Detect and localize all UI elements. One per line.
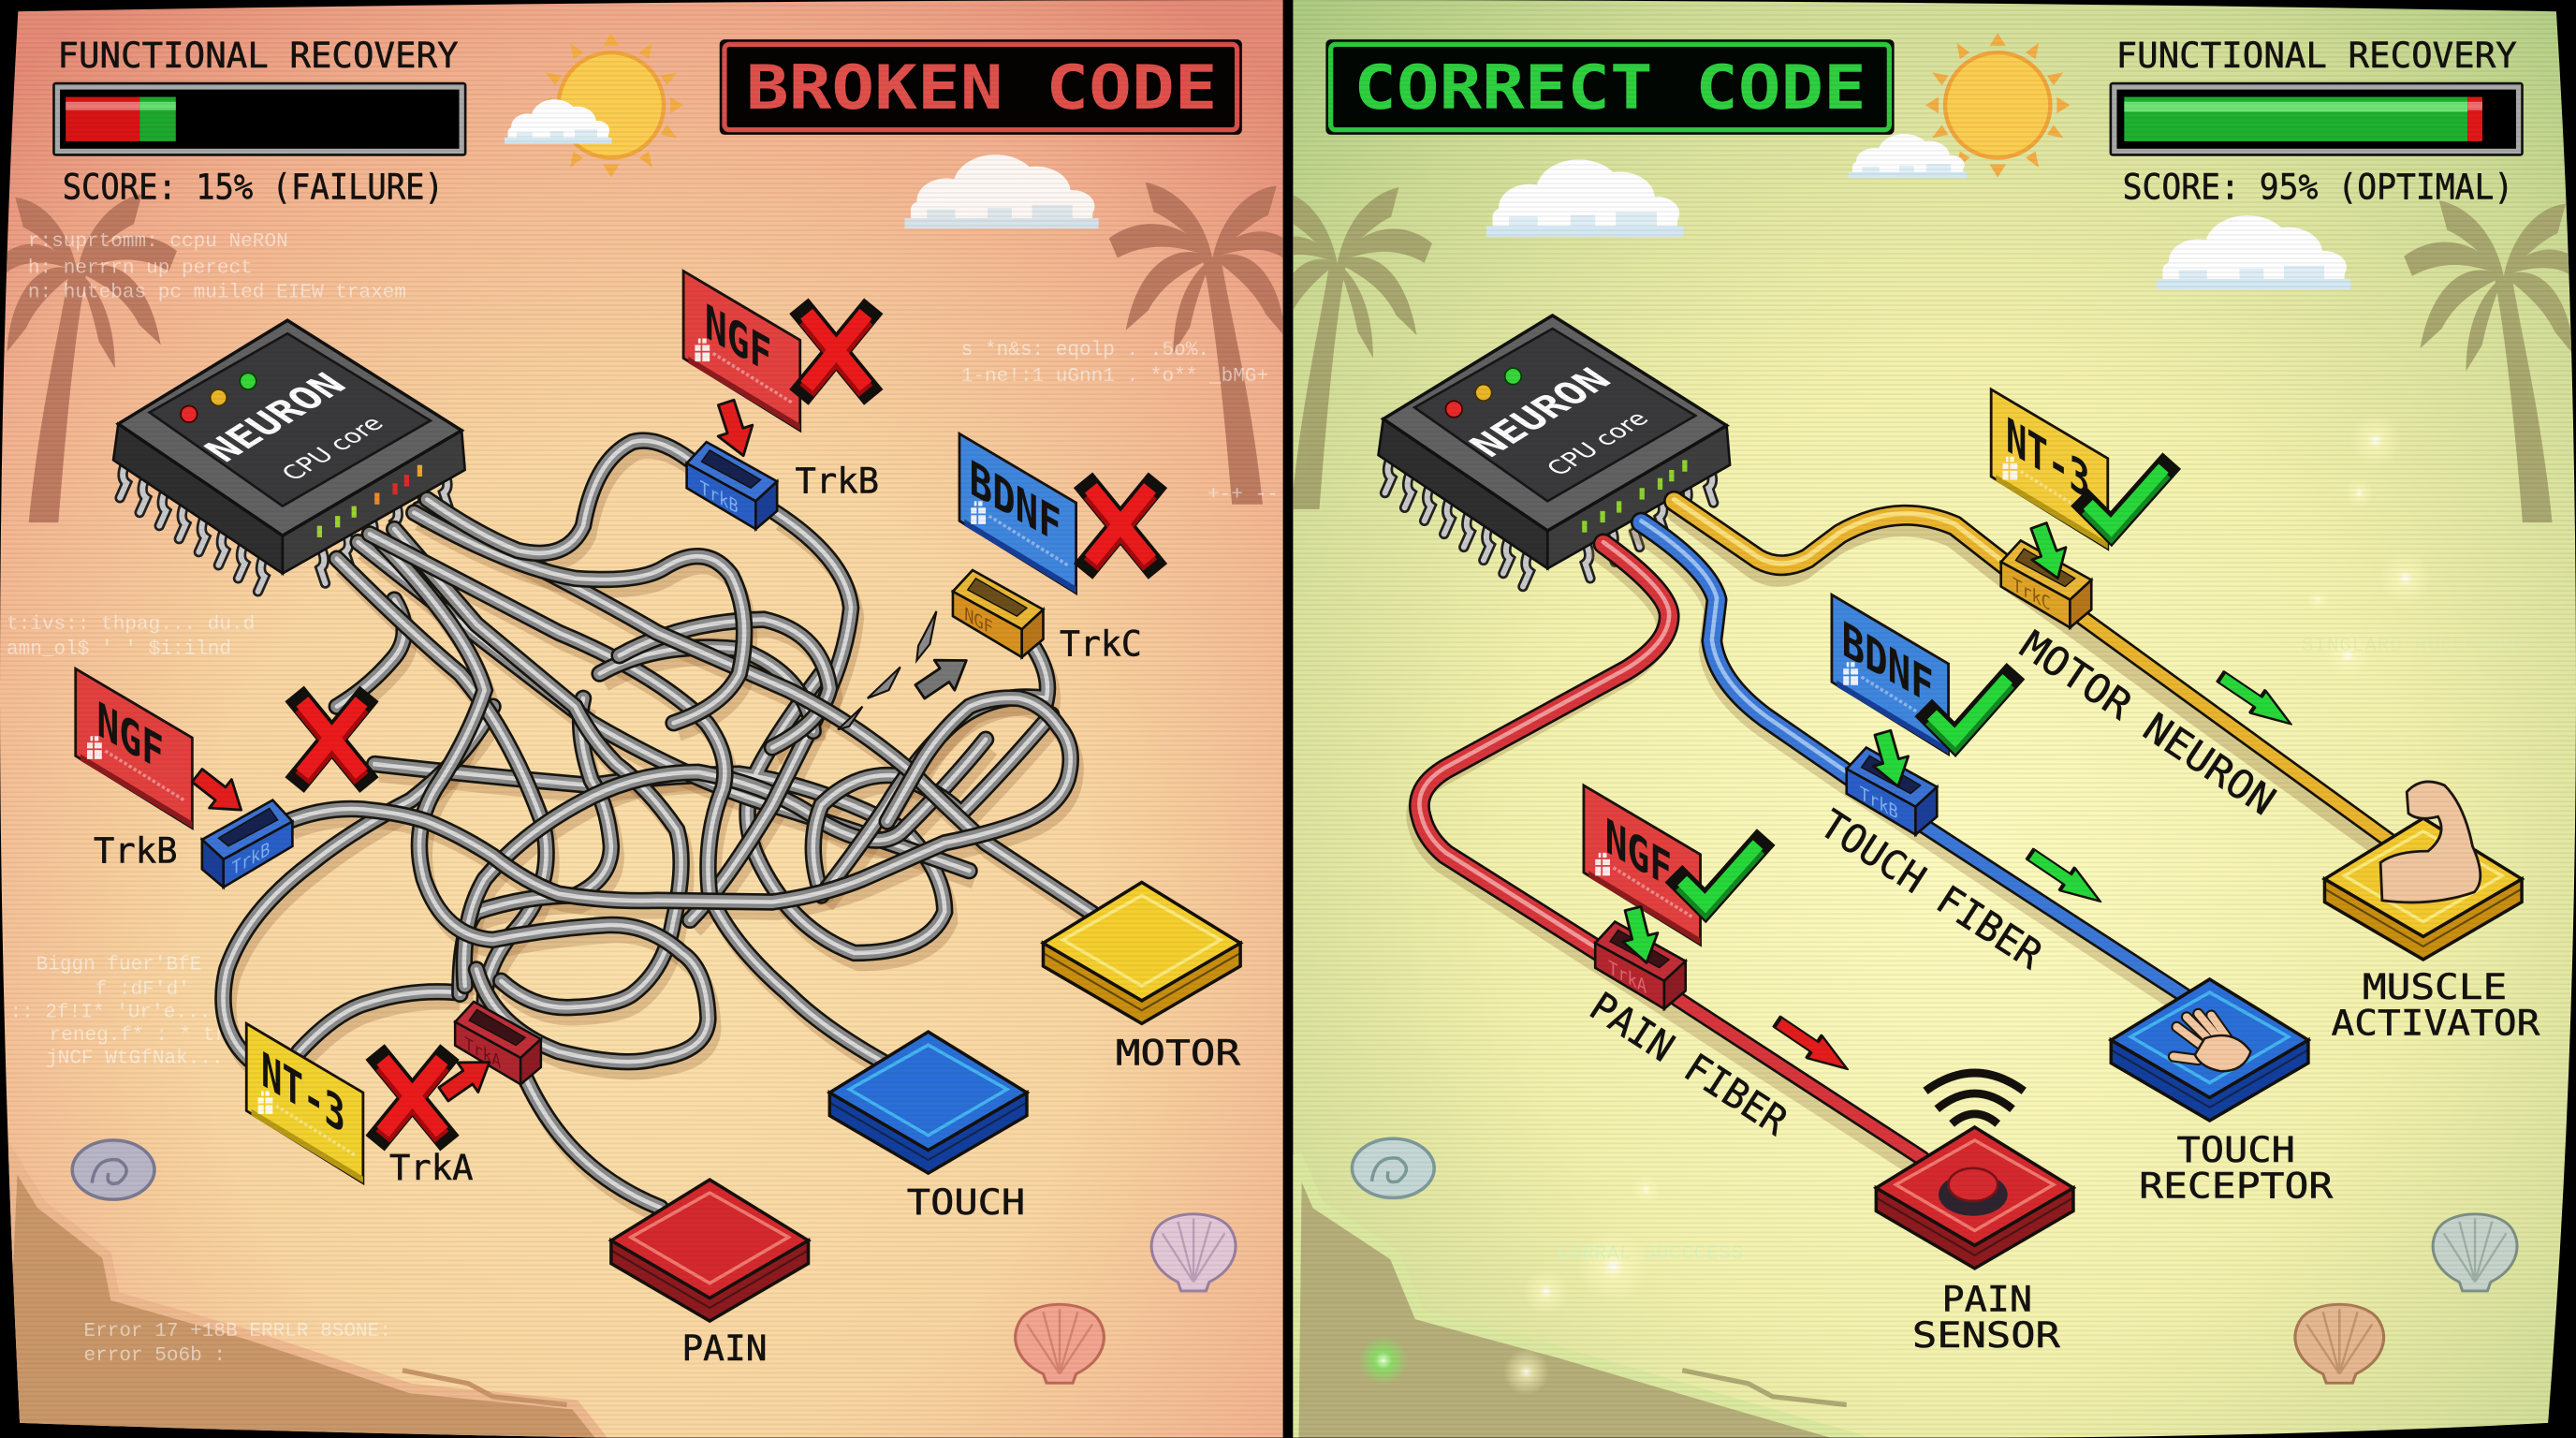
label motor: MOTOR (1116, 1032, 1240, 1073)
receptor: TrkA red: TrkA (1608, 956, 1647, 998)
tangled wires (223, 441, 1097, 1217)
button pain (611, 1180, 809, 1321)
ghost terminal text lower left: Biggn fuer'BfE (37, 953, 201, 976)
check NGF (1682, 844, 1758, 907)
ghost terminal text top right: 1-ne!:1 uGnn1 . *o** _bMG+ (961, 365, 1268, 388)
label muscle activator (2331, 966, 2540, 1044)
ghost terminal text middle left: t:ivs:: thpag... du.d (7, 613, 255, 636)
label pain fiber: PAIN FIBER (1582, 983, 1796, 1145)
ghost terminal text top left: r:suprtomm: ccpu NeRON (28, 230, 288, 253)
card NT-3: NT-3 (2006, 407, 2090, 512)
arrow green to TrkA (1616, 904, 1664, 967)
x mark NGF (807, 314, 866, 391)
ghost terminal text top right: s *n&s: eqolp . .5o%. (961, 339, 1209, 361)
receptor: TrkB top (687, 442, 777, 529)
flow arrow blue wire (2023, 844, 2108, 913)
receptor: TrkB lower (202, 800, 292, 888)
cloud mid (1486, 159, 1684, 237)
arrow green to TrkB (1866, 727, 1915, 791)
ghost terminal text top left (28, 230, 406, 304)
palm tree left (0, 194, 177, 522)
sun (539, 33, 683, 178)
beach sand (0, 1158, 607, 1438)
arrow green to TrkC (2022, 520, 2075, 584)
ghost terminal text lower left: jNCF WtGfNak... (46, 1048, 224, 1070)
sun (1925, 33, 2070, 178)
icon: hand (2174, 1014, 2250, 1071)
receptor: TrkB top: TrkB (700, 477, 739, 519)
ghost terminal text middle left (7, 614, 253, 656)
shell pink (1151, 1214, 1236, 1291)
panel: broken code (0, 0, 1308, 1438)
x mark left (302, 701, 361, 779)
receptor: TrkC gold (2001, 540, 2091, 627)
ghost text: SINGLARD RUCCESON (2302, 635, 2515, 657)
flow arrow red wire (1770, 1011, 1854, 1080)
ghost terminal text middle left: amn_ol$ ' ' $i:ilnd (7, 638, 231, 661)
title: correct code (1325, 39, 1895, 135)
ghost terminal text top right (961, 339, 1279, 506)
touch receptor (2111, 979, 2308, 1121)
card NGF left: NGF (97, 692, 164, 784)
label pain: PAIN (681, 1328, 768, 1369)
shell round (1352, 1138, 1434, 1197)
check NT-3 (2088, 468, 2163, 531)
receptor: TrkA broken (455, 1002, 541, 1084)
receptor: TrkC gold: NGF (964, 603, 993, 639)
shell tan (2295, 1304, 2384, 1383)
cloud large (905, 154, 1099, 228)
card NGF top: NGF (705, 294, 771, 386)
arrow red to TrkB (709, 397, 761, 462)
arrow red to TrkA (433, 1048, 500, 1109)
palm tree left (1251, 187, 1432, 509)
ghost error text: Error 17 +18B ERRLR 8SONE: (84, 1320, 391, 1343)
label touch receptor: RECEPTOR (2139, 1165, 2334, 1206)
broken wire fragments (838, 611, 936, 729)
label pain sensor: PAIN (1942, 1279, 2032, 1320)
shell round (72, 1140, 154, 1199)
ghost text lower: CORRAL SUCCCESS (1558, 1242, 1743, 1265)
function recovery label: FUNCTIONAL RECOVERY (2116, 35, 2517, 76)
ghost terminal text lower left: f :dF'd' (95, 978, 190, 1001)
icon: flexed arm (2380, 782, 2481, 902)
pain sensor (1876, 1127, 2073, 1269)
palm tree right (2404, 200, 2576, 522)
score optimal: SCORE: 95% (OPTIMAL) (2123, 166, 2513, 207)
score failure: SCORE: 15% (FAILURE) (63, 166, 444, 207)
title: correct code: CORRECT CODE (1354, 53, 1866, 124)
cloud small (505, 99, 611, 143)
health bar failure (52, 82, 466, 156)
label motor neuron: MOTOR NEURON (2012, 622, 2284, 824)
beach sand right (1293, 1155, 1880, 1438)
card NGF left (76, 668, 192, 829)
ghost terminal text top left: h: nerrrn up perect (28, 257, 253, 279)
label TrkC: TrkC (1060, 623, 1142, 664)
receptor: TrkA red (1595, 922, 1686, 1009)
label touch receptor: TOUCH (2177, 1129, 2295, 1170)
flow arrow yellow wire (2214, 666, 2298, 735)
receptor: TrkC gold: TrkC (2012, 573, 2051, 615)
ghost error text (84, 1323, 387, 1360)
neuron chip correct (1379, 315, 1730, 587)
yellow wire motor neuron (1674, 500, 2391, 855)
card NGF: NGF (1605, 809, 1672, 900)
button motor (1043, 882, 1240, 1023)
red wire pain fiber (1414, 542, 1922, 1170)
label TrkB lower: TrkB (94, 829, 178, 871)
ghost terminal text lower left: reneg.f* : * tr+ (50, 1024, 239, 1047)
card BDNF (959, 433, 1076, 594)
check BDNF (1932, 679, 2008, 741)
label touch receptor (2139, 1129, 2334, 1206)
blue wire touch fiber (1636, 521, 2185, 1005)
x mark NT-3 (383, 1060, 442, 1137)
icon: wifi signal (1925, 1073, 2024, 1123)
card BDNF (1832, 594, 1949, 755)
receptor: TrkA broken: TrkA (464, 1034, 501, 1073)
receptor TrkB lower face text: TrkB (231, 837, 270, 880)
card NT-3 (1991, 389, 2108, 549)
card BDNF: BDNF (1841, 611, 1934, 717)
shell gray (2433, 1214, 2517, 1291)
card NGF top (683, 271, 800, 431)
label touch fiber: TOUCH FIBER (1812, 800, 2051, 978)
ghost terminal text top right: +-+ -- (1208, 484, 1279, 506)
card NT-3 (246, 1023, 363, 1183)
arrow red to TrkB lower (186, 761, 253, 824)
neuron chip broken (113, 320, 465, 592)
gray arrow (910, 645, 976, 707)
neuron chip correct: NEURON (1460, 361, 1620, 463)
label pain sensor: SENSOR (1912, 1314, 2060, 1356)
cloud right (2157, 215, 2350, 289)
health bar optimal (2110, 82, 2524, 156)
palm tree right (1109, 182, 1283, 505)
label muscle activator: ACTIVATOR (2331, 1003, 2540, 1044)
function recovery label: FUNCTIONAL RECOVERY (57, 35, 459, 76)
glow sparkles (1358, 414, 2432, 1395)
x mark BDNF (1090, 488, 1150, 565)
shell coral (1016, 1304, 1104, 1383)
title: broken code (720, 39, 1242, 135)
panel: correct code (1251, 0, 2576, 1438)
cloud small (1849, 134, 1967, 178)
button touch (829, 1032, 1027, 1173)
receptor: TrkC gold (953, 570, 1043, 657)
ghost terminal text top left: n: hutebas pc muiled EIEW traxem (28, 282, 406, 304)
neuron chip broken: NEURON (195, 366, 356, 469)
label touch: TOUCH (907, 1181, 1025, 1223)
label TrkB top: TrkB (795, 461, 879, 502)
receptor: TrkB blue: TrkB (1860, 782, 1898, 824)
ghost terminal text lower left: :: 2f!I* 'Ur'e... (10, 1001, 211, 1023)
label muscle activator: MUSCLE (2363, 966, 2507, 1007)
card BDNF: BDNF (970, 450, 1061, 556)
neuron chip broken: CPU core (276, 413, 390, 485)
label TrkA: TrkA (389, 1147, 474, 1188)
title: broken code: BROKEN CODE (746, 53, 1218, 124)
ghost terminal text lower left (15, 955, 221, 1067)
neuron chip correct: CPU core (1542, 408, 1655, 480)
ghost error text: error 5o6b : (84, 1344, 226, 1367)
card NGF (1584, 785, 1701, 945)
receptor: TrkB blue (1847, 748, 1937, 835)
muscle activator (2324, 782, 2522, 960)
label pain sensor (1912, 1279, 2060, 1356)
card NT-3: NT-3 (261, 1041, 345, 1146)
